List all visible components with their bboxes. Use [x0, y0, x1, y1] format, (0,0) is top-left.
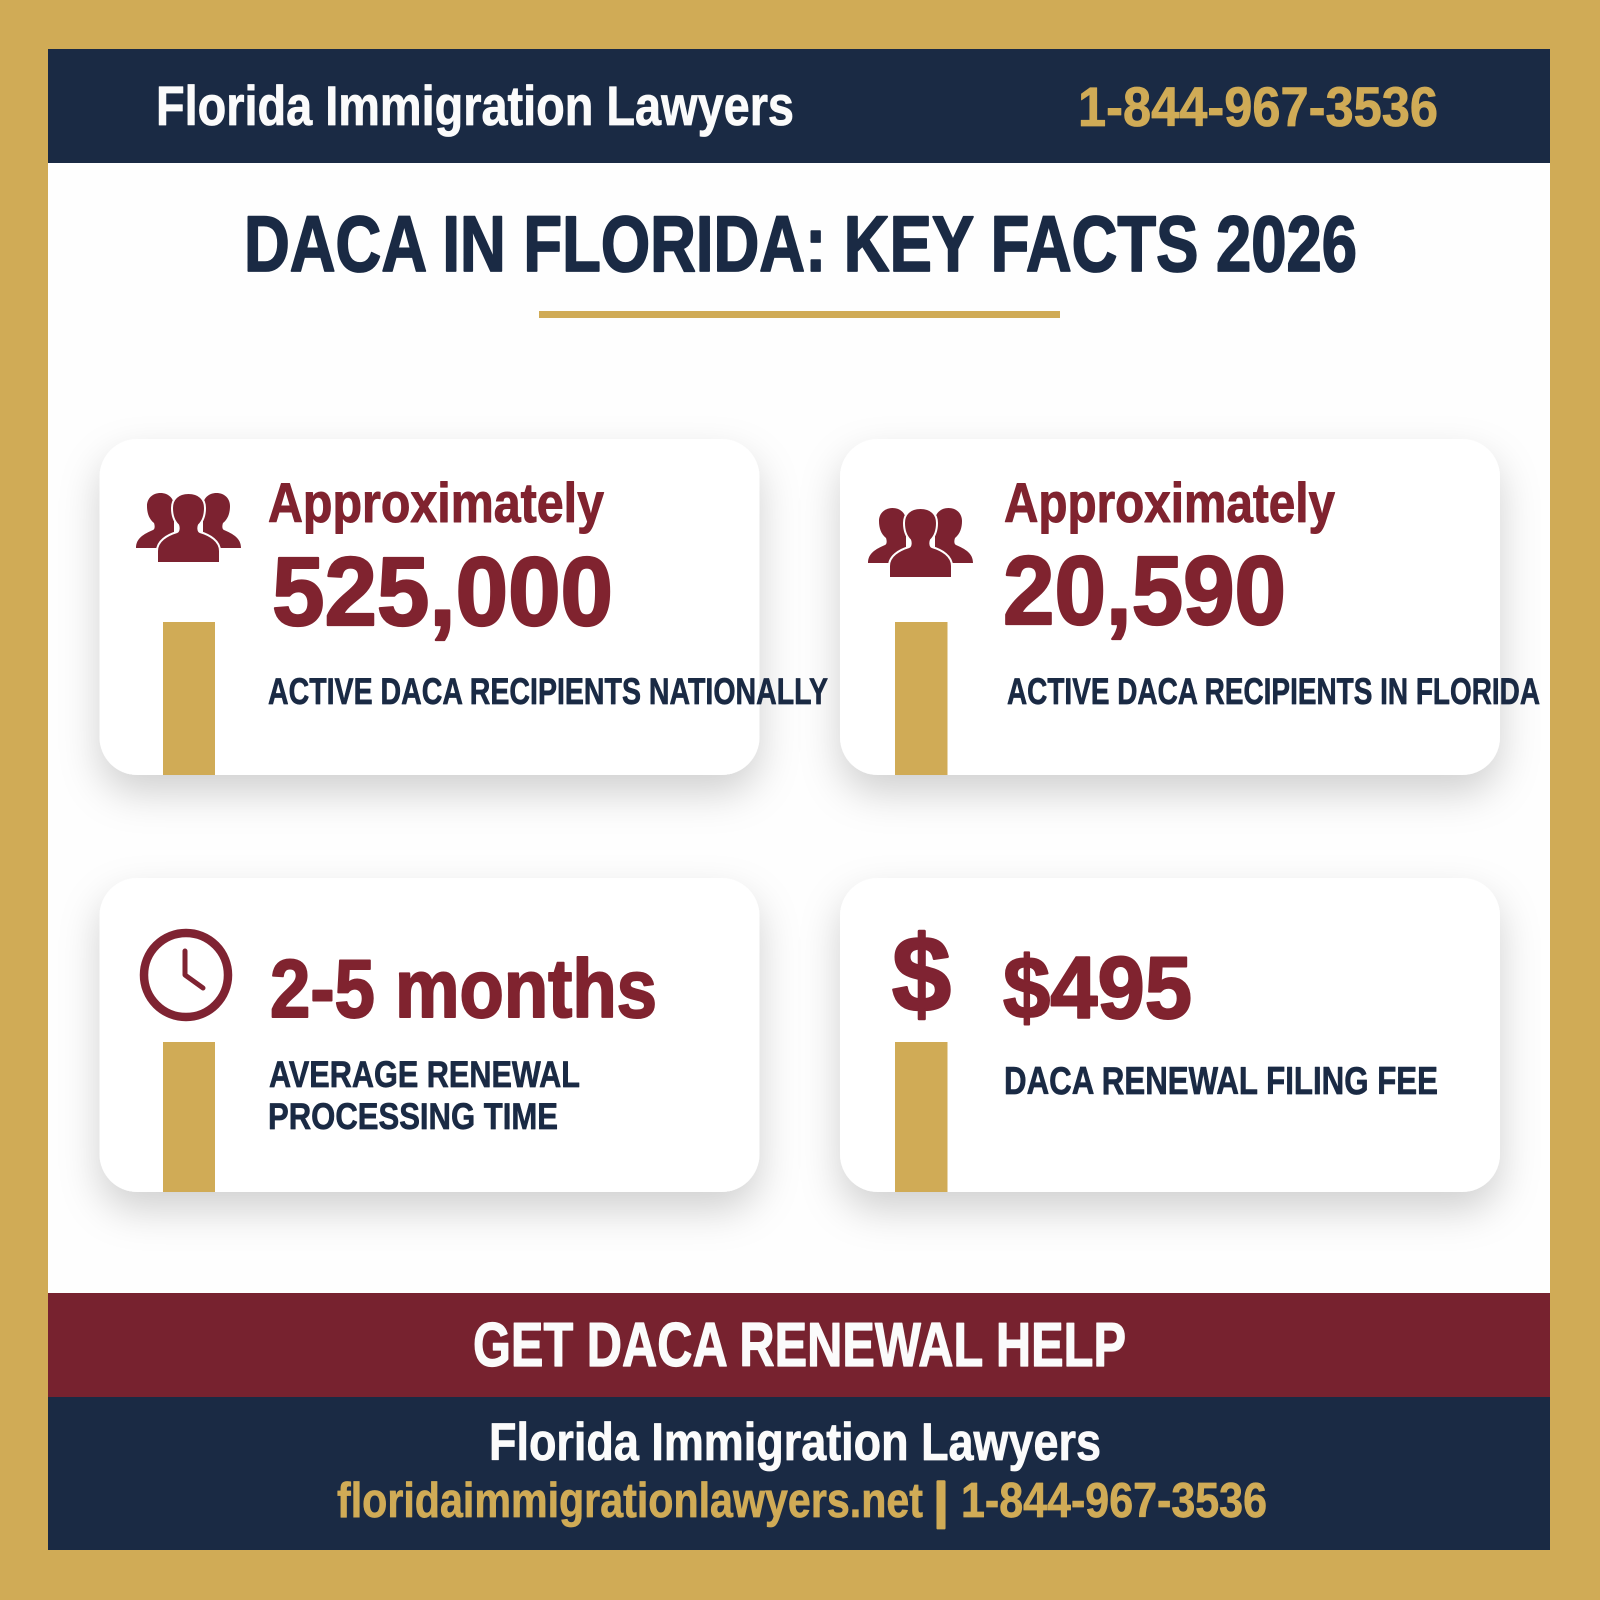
- approximately label: Approximately: [268, 471, 604, 534]
- fee caption: DACA RENEWAL FILING FEE: [1004, 1060, 1438, 1103]
- header firm name: Florida Immigration Lawyers: [156, 74, 794, 137]
- 2-5 months value: 2-5 months: [270, 942, 657, 1035]
- footer website and phone: floridaimmigrationlawyers.net: [337, 1474, 923, 1528]
- panel: processing time: [100, 878, 760, 1192]
- footer website and phone: |: [934, 1474, 948, 1528]
- icon: people group: [868, 508, 973, 578]
- title underline: [539, 311, 1060, 318]
- 20,590 value: 20,590: [1003, 536, 1286, 645]
- panel: national recipients: [100, 439, 828, 775]
- footer website and phone: 1-844-967-3536: [961, 1474, 1267, 1528]
- icon: clock: [144, 933, 228, 1017]
- gold bar: [163, 622, 215, 775]
- national caption: ACTIVE DACA RECIPIENTS NATIONALLY: [268, 671, 828, 712]
- icon: dollar sign: $: [892, 913, 951, 1034]
- icon: people group: [136, 493, 241, 563]
- call to action text: GET DACA RENEWAL HELP: [473, 1311, 1126, 1380]
- footer: [48, 1397, 1550, 1550]
- processing caption: [268, 1054, 580, 1137]
- 525,000 value: 525,000: [272, 537, 613, 646]
- gold bar: [163, 1042, 215, 1192]
- gold bar: [895, 1042, 948, 1192]
- panel: filing fee: [840, 878, 1500, 1192]
- processing caption: AVERAGE RENEWAL: [269, 1054, 580, 1095]
- footer firm name: Florida Immigration Lawyers: [489, 1413, 1101, 1472]
- approximately label: Approximately: [1004, 471, 1335, 534]
- $495 value: $495: [1003, 938, 1192, 1037]
- header bar: [48, 49, 1550, 163]
- panel: Florida recipients: [840, 439, 1540, 775]
- call to action band: [48, 1293, 1550, 1397]
- processing caption: PROCESSING TIME: [268, 1096, 558, 1137]
- header phone number: 1-844-967-3536: [1078, 75, 1438, 138]
- gold bar: [895, 622, 948, 775]
- main title: DACA IN FLORIDA: KEY FACTS 2026: [244, 199, 1357, 288]
